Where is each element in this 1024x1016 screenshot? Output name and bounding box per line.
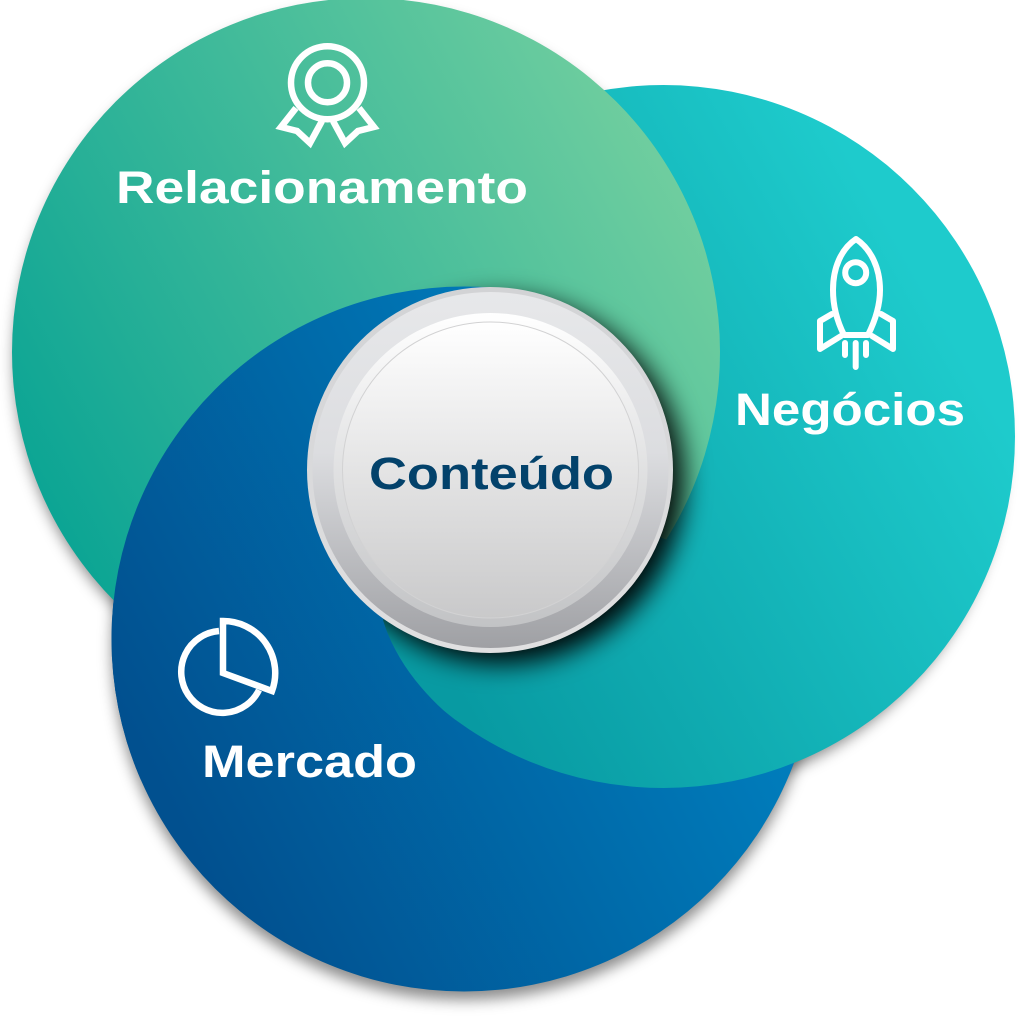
circle: Negócios [312, 85, 1015, 788]
circle: Relacionamento [12, 0, 720, 600]
center button shadow [318, 298, 684, 664]
icon: medal [281, 46, 374, 143]
icon: rocket [820, 239, 893, 367]
label: Relacionamento: Relacionamento [116, 162, 528, 213]
icon: pie chart [181, 621, 275, 713]
label: Conteúdo: Conteúdo [369, 448, 614, 499]
circle: Mercado overlap above Relacionamento [112, 286, 486, 780]
center button: Conteúdo [307, 287, 673, 653]
circle: Mercado base [112, 286, 816, 992]
label: Negócios: Negócios [735, 384, 965, 435]
label: Mercado: Mercado [202, 736, 417, 787]
